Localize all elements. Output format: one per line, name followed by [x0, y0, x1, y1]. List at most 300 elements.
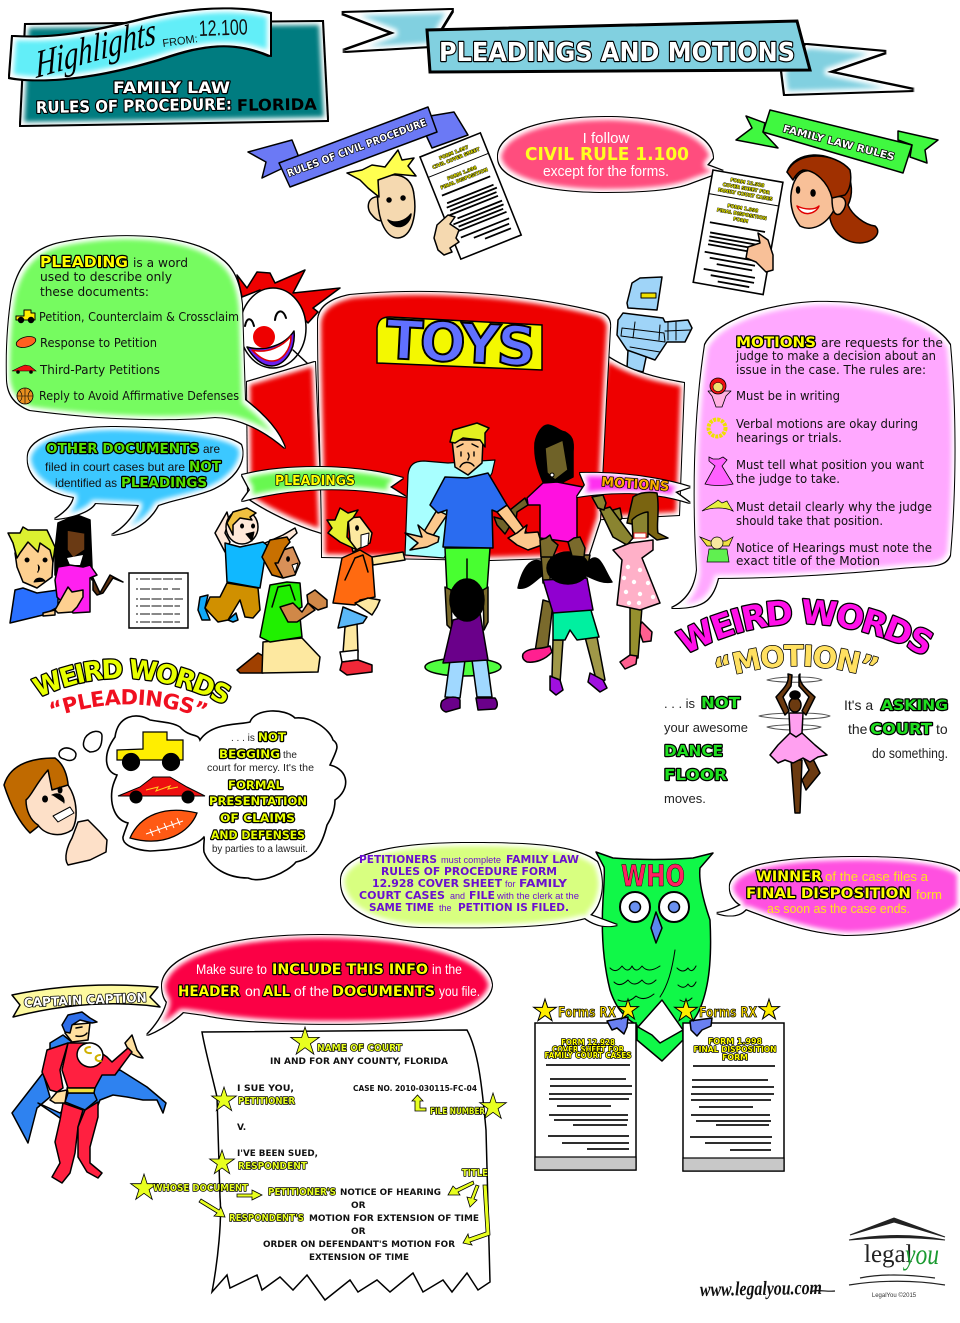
item text: should take that position. — [736, 514, 883, 528]
polka dots — [622, 565, 655, 605]
star — [759, 999, 779, 1019]
open mouth — [292, 563, 298, 573]
website — [700, 1277, 835, 1301]
curved subheading: “MOTION” — [715, 644, 879, 674]
petitioner star — [212, 1087, 236, 1111]
logo word legal: legal — [864, 1241, 913, 1268]
briefs — [65, 1093, 97, 1110]
item text: Response to Petition — [40, 336, 157, 350]
man's hand — [434, 215, 459, 255]
legal document example — [131, 1027, 506, 1300]
form sheet held by woman — [693, 170, 783, 295]
ear — [368, 197, 382, 221]
bubble shape — [147, 935, 492, 1035]
toys sign text: TOYS — [384, 308, 537, 379]
right arm — [497, 505, 527, 537]
woman leg — [535, 600, 553, 655]
girl shoes — [550, 673, 607, 695]
banner text: PLEADINGS — [275, 474, 355, 489]
belt hand — [50, 1090, 67, 1103]
clown face — [240, 288, 306, 368]
face — [791, 171, 834, 228]
store centre — [318, 292, 610, 560]
file arrow — [412, 1095, 426, 1111]
text: of the case files a — [825, 869, 929, 884]
line one: PETITIONERS — [359, 854, 437, 866]
boy hand — [55, 587, 83, 613]
chest letters — [85, 1047, 101, 1061]
woman shirt — [527, 482, 583, 543]
girl hands — [540, 535, 585, 557]
label text: Forms RX — [558, 1005, 616, 1021]
logo word you: you — [903, 1238, 939, 1271]
motion definition left — [664, 694, 748, 806]
speech bubble: petitioners — [341, 843, 617, 927]
girl arm — [93, 575, 123, 595]
and defenses words: AND DEFENSES — [211, 828, 305, 842]
woman far arm and hand — [494, 498, 528, 534]
second form line: FINAL DISPOSITION — [716, 207, 767, 222]
pointing hand — [265, 528, 297, 550]
text: are requests for the — [821, 336, 943, 350]
child arms — [445, 587, 488, 630]
label text: Forms RX — [699, 1005, 757, 1021]
icon: dress — [705, 457, 733, 486]
banner: captain caption — [12, 985, 160, 1017]
first form name: FORM 1.997 — [438, 145, 470, 162]
text: used to describe only — [40, 270, 172, 284]
sheet fold — [428, 153, 489, 177]
line four end: with the clerk at the — [496, 891, 579, 901]
i sue you: I SUE YOU, — [237, 1084, 294, 1094]
arrow to respondent's — [199, 1199, 225, 1217]
star — [618, 999, 638, 1019]
line two: RULES OF PROCEDURE FORM — [381, 866, 557, 878]
curved heading: WEIRD WORDS — [674, 598, 934, 655]
lowered arm — [42, 1043, 68, 1092]
form sheet held by man — [420, 133, 521, 259]
begging word: BEGGING — [219, 747, 280, 761]
text: do something. — [872, 745, 948, 761]
shoe — [340, 660, 372, 675]
eyes and nose — [43, 787, 64, 803]
main title ribbon — [343, 10, 913, 94]
icon: tiara — [702, 500, 733, 511]
form title line: FORM — [722, 1053, 748, 1062]
header panel: family law rules of procedure — [10, 9, 327, 125]
owl — [596, 852, 713, 1061]
logo base lines — [849, 1275, 945, 1285]
eye — [356, 526, 358, 530]
item text: Must detail clearly why the judge — [736, 500, 932, 514]
child legs — [445, 660, 492, 698]
icon: yellow truck — [16, 310, 35, 322]
clown toy — [237, 270, 340, 368]
text: to — [936, 721, 948, 737]
torso and raised arm — [62, 1043, 132, 1088]
hair bun — [790, 691, 800, 699]
documents word: DOCUMENTS — [332, 984, 435, 1000]
ear — [832, 196, 846, 214]
item text: Must tell what position you want — [736, 458, 924, 472]
owl eyes — [620, 892, 650, 922]
clown mouth inner — [252, 336, 291, 361]
tutu — [770, 733, 827, 763]
page — [683, 1023, 784, 1171]
heading word: OTHER DOCUMENTS — [46, 442, 199, 457]
not word: NOT — [701, 694, 741, 712]
text: identified as — [55, 476, 117, 490]
left arm — [422, 510, 447, 540]
girl pigtails — [518, 558, 612, 588]
boy face details — [25, 558, 47, 582]
spiky hair — [327, 508, 358, 550]
truck illustration — [117, 732, 183, 770]
form title line: FINAL DISPOSITION — [694, 1045, 776, 1054]
face — [65, 1023, 90, 1042]
toy store building — [247, 292, 684, 560]
left leg — [52, 1103, 83, 1183]
banner text: RULES OF CIVIL PROCEDURE — [286, 118, 429, 180]
formal word: FORMAL — [228, 778, 284, 792]
text: in the — [432, 961, 462, 977]
speech bubble: pleading definition — [7, 236, 285, 448]
figure: girl in purple from behind — [518, 535, 612, 695]
cape collar — [50, 1035, 72, 1052]
title arrow three — [463, 1185, 490, 1245]
arm raised — [215, 512, 230, 552]
eyes — [797, 187, 815, 196]
title label: TITLE — [462, 1168, 488, 1179]
arm — [280, 603, 315, 622]
bubble shape — [498, 117, 723, 192]
asking word: ASKING — [881, 698, 948, 714]
boy shirt — [10, 588, 58, 623]
green ground shape — [425, 658, 501, 676]
ribbon main band — [427, 21, 810, 72]
text: as soon as the case ends. — [767, 901, 910, 916]
banner shape — [577, 473, 690, 503]
woman's hand — [746, 233, 773, 272]
underline flourish — [810, 1291, 835, 1292]
pants — [205, 583, 260, 622]
final disposition words: FINAL DISPOSITION — [746, 886, 911, 902]
ribbon left tail — [343, 10, 452, 51]
text: of the — [294, 983, 329, 999]
highlights script: Highlights — [34, 10, 156, 87]
polka girl leg — [630, 607, 642, 658]
polka girl dress — [613, 540, 660, 610]
cape left — [12, 1073, 50, 1143]
motion rings back — [759, 677, 830, 730]
file number star — [480, 1093, 506, 1118]
facial features — [76, 1027, 87, 1036]
ribbon right tail — [782, 45, 913, 94]
floor word: FLOOR — [664, 766, 727, 784]
logo roof — [849, 1218, 945, 1240]
line five end: PETITION IS FILED. — [458, 902, 569, 914]
text: you file. — [439, 983, 480, 999]
belt — [67, 1088, 95, 1093]
polka girl hair back — [627, 492, 668, 540]
child dress — [443, 613, 488, 663]
text: form — [916, 887, 942, 902]
logo credit: LegalYou ©2015 — [872, 1292, 917, 1299]
race car illustration — [118, 777, 205, 803]
shirt — [333, 550, 375, 605]
banner: pleadings — [242, 467, 406, 501]
figure: boy in green kneeling — [237, 537, 327, 673]
right hand — [508, 525, 542, 550]
sheet lines — [700, 222, 765, 288]
toys sign — [377, 317, 542, 370]
polka girl back hand — [610, 508, 622, 526]
figure: worried child with thought bubble — [4, 731, 107, 865]
hands — [307, 590, 327, 610]
all word: ALL — [263, 984, 290, 1000]
owl tail notch — [638, 1000, 683, 1043]
girl head — [547, 552, 589, 584]
name of court: NAME OF COURT — [317, 1043, 402, 1054]
county line: IN AND FOR ANY COUNTY, FLORIDA — [270, 1057, 448, 1067]
robot toy — [617, 277, 692, 372]
item text: Notice of Hearings must note the — [736, 541, 932, 555]
shoes — [198, 595, 238, 622]
banner: rules of civil procedure — [248, 107, 468, 187]
clasped hands — [66, 820, 107, 865]
logo: legalyou — [849, 1218, 945, 1299]
rule number: 12.100 — [198, 14, 248, 41]
clown eyes — [245, 311, 286, 326]
item text: Verbal motions are okay during — [736, 417, 918, 431]
store left wing — [247, 362, 322, 533]
banner tails — [248, 112, 468, 178]
store right wing — [585, 355, 684, 520]
not word: NOT — [258, 730, 286, 744]
petitioner: PETITIONER — [238, 1096, 296, 1107]
second form name: FORM 1.998 — [447, 165, 478, 182]
banner text: CAPTAIN CAPTION — [23, 990, 147, 1010]
text: issue in the case. The rules are: — [736, 363, 926, 377]
first form line: COVER SHEET FOR — [722, 182, 771, 196]
panel subtitle: RULES OF PROCEDURE: — [36, 95, 232, 117]
icon: red car — [12, 365, 36, 374]
item text: Reply to Avoid Affirmative Defenses — [39, 389, 239, 403]
court word: COURT — [870, 720, 933, 738]
respondent's: RESPONDENT'S — [229, 1213, 304, 1224]
extension line: EXTENSION OF TIME — [309, 1253, 409, 1263]
second form name: FORM 1.998 — [727, 203, 759, 214]
or: OR — [351, 1201, 366, 1211]
head — [452, 440, 483, 475]
girl neck — [67, 555, 83, 565]
standing leg — [791, 760, 802, 813]
line four middle: and — [450, 891, 465, 901]
label: forms rx right — [675, 999, 779, 1021]
figure: captain caption superhero — [12, 1012, 166, 1183]
face — [272, 547, 300, 578]
item text: hearings or trials. — [736, 431, 842, 445]
hair back — [787, 155, 878, 243]
presentation word: PRESENTATION — [209, 794, 307, 808]
text: filed in court cases but are — [45, 460, 185, 474]
form title line: FORM 12.928 — [561, 1038, 615, 1047]
hair fringe — [787, 156, 851, 198]
sleeve line — [345, 555, 368, 580]
hair — [4, 758, 68, 833]
girl arms — [541, 555, 590, 583]
order line: ORDER ON DEFENDANT'S MOTION FOR — [263, 1240, 455, 1250]
banner: family law rules — [736, 110, 938, 173]
definition text: by parties to a lawsuit. — [212, 844, 308, 855]
clown nose — [253, 326, 275, 348]
bent leg — [802, 757, 820, 790]
bubble shape — [28, 427, 243, 535]
text: are — [203, 442, 220, 456]
boot — [237, 653, 265, 673]
sock — [340, 650, 358, 662]
banner band — [279, 107, 437, 187]
eyes and smile — [387, 196, 411, 227]
heading word: PLEADING — [40, 253, 128, 271]
item text: the judge to take. — [736, 472, 840, 486]
chest emblem — [74, 1040, 106, 1070]
robot details — [621, 322, 690, 352]
bubble shape — [672, 302, 955, 608]
boy head — [15, 537, 53, 588]
speech bubble: motions definition — [672, 302, 955, 608]
grimace — [53, 807, 74, 822]
left hand — [405, 525, 439, 550]
robot body — [617, 313, 692, 360]
face — [241, 524, 255, 541]
bubble shape — [341, 843, 617, 927]
file number: FILE NUMBER — [430, 1107, 485, 1117]
motion definition right — [844, 697, 948, 761]
thought bubble with definition — [107, 711, 346, 880]
sheet fold — [709, 194, 779, 206]
figure: worried man in blue — [405, 423, 542, 590]
pants seam — [466, 559, 468, 585]
versus: V. — [237, 1123, 246, 1133]
lines — [136, 579, 183, 622]
text: the — [848, 721, 868, 737]
line five middle: the — [439, 903, 452, 913]
bubble shape — [7, 236, 285, 448]
banner shape — [12, 985, 160, 1017]
woman hair — [535, 425, 573, 482]
page — [129, 573, 188, 628]
figure: boy in blue jumping — [198, 508, 297, 622]
page lines — [546, 1065, 632, 1149]
curved subheading: “PLEADINGS” — [50, 689, 208, 714]
document with lines — [129, 573, 188, 628]
speech bubble: other documents — [28, 427, 243, 535]
banner tails — [736, 116, 938, 163]
line four: COURT CASES — [359, 890, 445, 902]
side hand — [355, 598, 380, 615]
second form line two: FORM — [733, 216, 749, 225]
figure: smiling blond man — [347, 150, 416, 238]
clown mouth — [247, 331, 294, 366]
line one middle: must complete — [441, 855, 501, 865]
title arrow one — [448, 1181, 474, 1195]
respondent star — [210, 1150, 234, 1174]
been sued: I'VE BEEN SUED, — [237, 1149, 318, 1159]
page base — [683, 1158, 784, 1171]
robot neck — [627, 350, 647, 372]
sheet — [693, 170, 783, 295]
item text: Third-Party Petitions — [39, 363, 160, 377]
shirt — [225, 542, 267, 588]
figure: small child from behind — [425, 579, 501, 712]
item text: exact title of the Motion — [736, 554, 880, 568]
text: is a word — [133, 256, 188, 270]
figure: child in orange pointing — [327, 508, 405, 675]
boy other hand — [43, 610, 55, 616]
line three middle: for — [505, 879, 516, 889]
icon: green doll — [700, 537, 733, 562]
bubble line one: I follow — [583, 130, 630, 147]
first form subtitle: CIVIL COVER SHEET — [432, 146, 482, 171]
smile — [797, 206, 819, 214]
woman face — [545, 440, 568, 480]
first form name: FORM 12.928 — [730, 177, 765, 189]
owl eyes — [659, 892, 689, 922]
light cyan panel behind — [405, 460, 495, 558]
hair — [262, 537, 290, 578]
pointing arm — [372, 552, 405, 565]
from label: FROM: — [162, 33, 199, 50]
form title line: FAMILY COURT CASES — [544, 1051, 632, 1060]
banner text: FAMILY LAW RULES — [782, 124, 896, 163]
petitioner's: PETITIONER'S — [268, 1187, 336, 1198]
web address: www.legalyou.com — [700, 1277, 822, 1301]
definition text: court for mercy. It's the — [207, 763, 314, 774]
polka girl grimace — [634, 533, 646, 538]
line four word: FILE — [469, 890, 495, 902]
florida: FLORIDA — [237, 95, 318, 115]
raised hand — [125, 1035, 143, 1058]
owl claws — [607, 1017, 712, 1036]
eye — [287, 557, 289, 561]
polka girl face — [632, 512, 648, 538]
banner shape — [242, 467, 406, 501]
page — [535, 1023, 636, 1170]
motion for extension: MOTION FOR EXTENSION OF TIME — [309, 1214, 479, 1224]
title arrow two — [467, 1185, 479, 1207]
icon: red haired doll — [708, 378, 731, 407]
polka girl hand — [592, 495, 606, 510]
child shoes — [441, 697, 497, 712]
or: OR — [351, 1227, 366, 1237]
line five: SAME TIME — [369, 902, 434, 914]
definition text: the — [283, 750, 297, 761]
line one end: FAMILY LAW — [506, 854, 579, 866]
icon: football — [15, 335, 37, 349]
page base — [535, 1157, 636, 1170]
face — [378, 175, 415, 238]
page lines — [690, 1066, 775, 1150]
owl word who: WHO — [621, 859, 685, 893]
heading word: MOTIONS — [736, 335, 816, 351]
whose document star — [131, 1174, 157, 1199]
panel title: FAMILY LAW — [113, 78, 230, 97]
girl shorts — [553, 607, 599, 640]
child hair — [450, 579, 484, 621]
owl beak — [651, 912, 662, 943]
cyan ribbon — [10, 9, 270, 79]
